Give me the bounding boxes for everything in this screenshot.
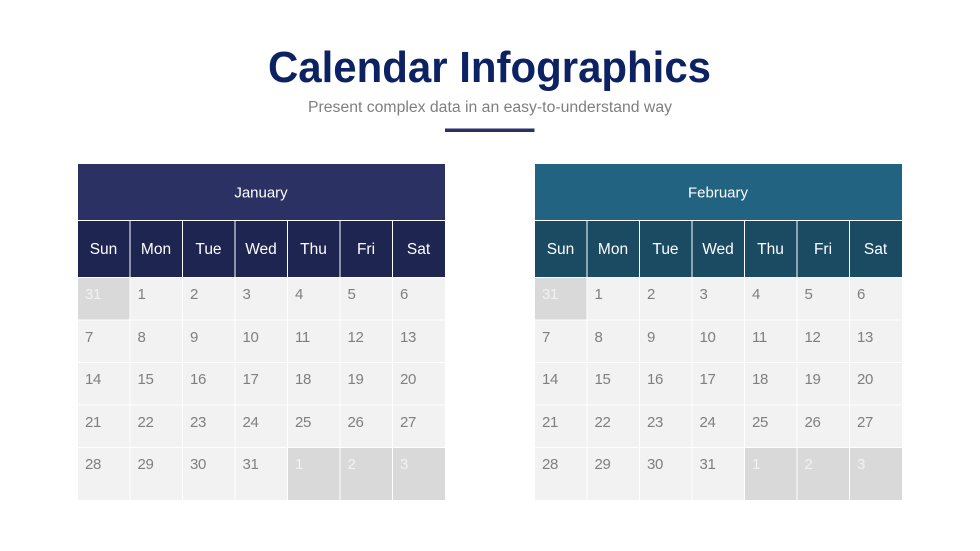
date grid: 23 <box>647 414 663 431</box>
weekday header row: Tue <box>195 241 222 258</box>
date grid: 19 <box>348 371 364 388</box>
date grid: 5 <box>348 286 356 303</box>
date grid: 1 <box>752 456 760 473</box>
date grid: 14 <box>542 371 558 388</box>
weekday header row: Mon <box>598 241 628 258</box>
weekday header row: Tue <box>652 241 679 258</box>
date grid: 20 <box>857 371 873 388</box>
date grid: 10 <box>242 329 259 346</box>
date grid: 2 <box>647 286 655 303</box>
date grid: 4 <box>752 286 760 303</box>
date grid: 11 <box>752 329 767 346</box>
date grid: 7 <box>85 329 93 346</box>
subtitle: Present complex data in an easy-to-understand way <box>308 99 672 116</box>
weekday header row: Wed <box>702 241 734 258</box>
date grid: 4 <box>295 286 303 303</box>
date grid: 15 <box>138 371 154 388</box>
date grid <box>535 278 902 500</box>
date grid: 13 <box>400 329 416 346</box>
date grid: 31 <box>242 456 259 473</box>
date grid: 1 <box>138 286 146 303</box>
date grid: 24 <box>242 414 259 431</box>
date grid: 25 <box>752 414 768 431</box>
date grid: 10 <box>700 329 716 346</box>
date grid: 3 <box>700 286 708 303</box>
date grid: 30 <box>190 456 206 473</box>
date grid: 2 <box>348 456 356 473</box>
date grid: 22 <box>594 414 611 431</box>
date grid: 18 <box>295 371 311 388</box>
month header: January: January <box>234 184 288 202</box>
date grid: 12 <box>804 329 821 346</box>
date grid: 6 <box>400 286 408 303</box>
date grid: 1 <box>594 286 603 303</box>
panel: February calendar <box>535 164 902 500</box>
date grid: 24 <box>700 414 716 431</box>
date grid: 3 <box>242 286 251 303</box>
weekday header row: Thu <box>757 241 784 258</box>
date grid: 30 <box>647 456 663 473</box>
title underline <box>445 128 534 132</box>
date grid: 6 <box>857 286 865 303</box>
date grid: 17 <box>242 371 259 388</box>
date grid: 26 <box>348 414 364 431</box>
date grid: 2 <box>804 456 813 473</box>
date grid: 13 <box>857 329 873 346</box>
weekday header row: Fri <box>357 241 375 258</box>
date grid: 2 <box>190 286 198 303</box>
date grid <box>78 278 445 500</box>
weekday header row <box>535 221 902 277</box>
date grid: 28 <box>542 456 558 473</box>
title: Calendar Infographics <box>268 43 711 92</box>
date grid: 27 <box>857 414 873 431</box>
date grid: 16 <box>190 371 206 388</box>
weekday header row: Mon <box>141 241 171 258</box>
date grid: 3 <box>857 456 865 473</box>
date grid: 18 <box>752 371 768 388</box>
date grid: 21 <box>542 414 558 431</box>
date grid: 31 <box>542 286 558 303</box>
weekday header row: Thu <box>300 241 327 258</box>
date grid: 23 <box>190 414 206 431</box>
date grid: 11 <box>295 329 310 346</box>
weekday header row: Sat <box>864 241 888 258</box>
date grid: 27 <box>400 414 416 431</box>
date grid: 21 <box>85 414 101 431</box>
date grid: 12 <box>348 329 364 346</box>
date grid: 26 <box>804 414 821 431</box>
month header: February <box>535 164 902 220</box>
date grid: 8 <box>594 329 603 346</box>
weekday header row: Sun <box>90 241 117 258</box>
date grid: 31 <box>85 286 101 303</box>
date grid: 29 <box>594 456 611 473</box>
month header: February: February <box>688 184 749 202</box>
weekday header row: Sun <box>547 241 574 258</box>
date grid: 17 <box>700 371 716 388</box>
date grid: 31 <box>700 456 716 473</box>
date grid: 9 <box>647 329 655 346</box>
date grid: 9 <box>190 329 198 346</box>
weekday header row <box>78 221 445 277</box>
date grid: 22 <box>138 414 154 431</box>
date grid: 8 <box>138 329 146 346</box>
date grid: 16 <box>647 371 663 388</box>
date grid: 14 <box>85 371 101 388</box>
date grid: 19 <box>804 371 821 388</box>
month header: January <box>78 164 445 220</box>
date grid: 28 <box>85 456 101 473</box>
date grid: 15 <box>594 371 611 388</box>
date grid: 20 <box>400 371 416 388</box>
weekday header row: Sat <box>407 241 431 258</box>
date grid: 5 <box>804 286 813 303</box>
weekday header row: Wed <box>245 241 277 258</box>
weekday header row: Fri <box>814 241 832 258</box>
date grid: 29 <box>138 456 154 473</box>
panel: January calendar <box>78 164 445 500</box>
date grid: 1 <box>295 456 303 473</box>
date grid: 3 <box>400 456 408 473</box>
date grid: 7 <box>542 329 550 346</box>
date grid: 25 <box>295 414 311 431</box>
